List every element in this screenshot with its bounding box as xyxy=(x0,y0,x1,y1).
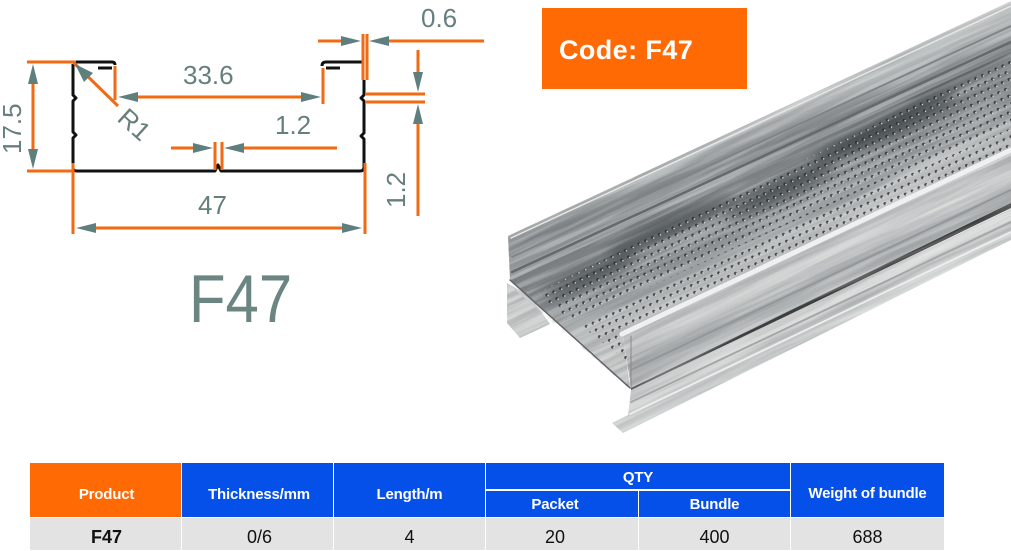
cell: weight xyxy=(791,518,944,550)
dimension labels: 1.2 xyxy=(275,110,311,140)
header: packet: Packet xyxy=(531,496,579,512)
header: product xyxy=(30,463,181,517)
header: thickness: Thickness/mm xyxy=(208,486,310,502)
cell: bundle xyxy=(639,518,790,550)
dimension labels xyxy=(0,3,457,220)
dimension labels: 0.6 xyxy=(421,3,457,33)
product photo: metal furring channel xyxy=(507,1,1011,433)
dimension labels: 47 xyxy=(198,190,227,220)
cell: product: F47 xyxy=(91,526,122,546)
header: length: Length/m xyxy=(377,486,442,502)
cell: packet xyxy=(486,518,638,550)
header: bundle: Bundle xyxy=(690,496,739,512)
profile dimension drawing xyxy=(0,3,484,234)
lower flange xyxy=(612,209,1011,433)
dimension labels: 33.6 xyxy=(183,60,234,90)
header: product: Product xyxy=(79,486,134,502)
header: thickness xyxy=(182,463,333,517)
cell: thickness xyxy=(182,518,333,550)
brushed metal texture xyxy=(507,4,1011,426)
dimension labels: R1 xyxy=(112,102,157,147)
header: length xyxy=(334,463,485,517)
cell: product xyxy=(30,518,181,550)
cell: thickness: 0/6 xyxy=(247,526,272,546)
highlights and ridges xyxy=(510,6,1011,414)
cell: length: 4 xyxy=(404,526,414,546)
back lower flange xyxy=(507,283,550,338)
orange dimension lines xyxy=(27,34,484,234)
perforations xyxy=(537,57,1011,322)
header: QTY xyxy=(486,463,790,489)
header: weight of bundle: Weight of bundle xyxy=(808,484,927,502)
shadow line xyxy=(631,203,1011,391)
header: weight of bundle xyxy=(791,463,944,517)
header: packet xyxy=(486,491,638,517)
front wall xyxy=(623,155,1011,388)
second perforated band xyxy=(580,128,1011,363)
dimension arrowheads xyxy=(28,36,423,233)
cell: packet: 20 xyxy=(545,526,565,546)
black profile outline xyxy=(73,62,364,171)
code badge xyxy=(542,8,747,89)
cell: length xyxy=(334,518,485,550)
cell: weight: 688 xyxy=(852,526,883,546)
cell: bundle: 400 xyxy=(699,526,730,546)
specification table xyxy=(30,463,944,550)
back wall xyxy=(508,1,1011,280)
header: QTY: QTY xyxy=(623,468,653,486)
floor xyxy=(510,52,1011,388)
product name F47: F47 xyxy=(189,261,292,337)
header: bundle xyxy=(639,491,790,517)
dimension labels: 1.2 xyxy=(381,172,411,208)
code badge: Code: F47 xyxy=(559,35,693,65)
dark patina xyxy=(542,42,1011,302)
